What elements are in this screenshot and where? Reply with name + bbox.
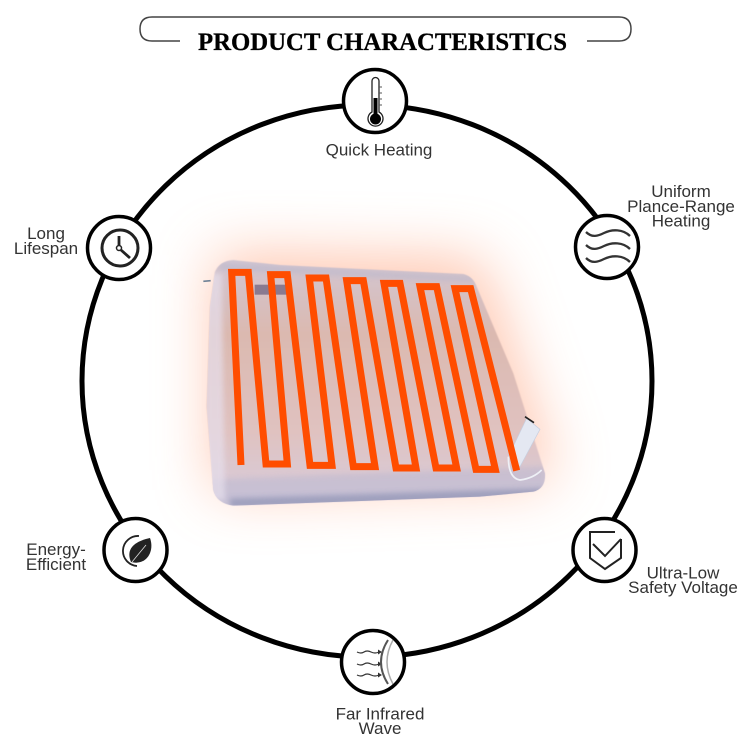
feature: far infrared wave bbox=[336, 630, 424, 738]
feature: long lifespan: Lifespan bbox=[14, 239, 78, 258]
cord end bbox=[203, 278, 211, 284]
feature: uniform heating bbox=[576, 182, 735, 278]
heating element bbox=[232, 272, 517, 471]
main ring bbox=[82, 105, 652, 657]
heated seat pad bbox=[203, 255, 555, 508]
cushion bbox=[203, 260, 547, 508]
icon: thermometer bbox=[344, 70, 406, 132]
label: Far Infrared bbox=[336, 704, 424, 724]
feature: ultra-low safety voltage bbox=[573, 518, 738, 597]
feature: uniform heating: Heating bbox=[652, 212, 710, 230]
icon: shield bbox=[573, 518, 636, 582]
title bracket bbox=[140, 17, 631, 41]
label: Long bbox=[27, 224, 65, 243]
feature: quick heating bbox=[326, 70, 432, 160]
feature: energy efficient bbox=[26, 518, 167, 582]
label: Uniform bbox=[651, 182, 711, 201]
feature: far infrared wave: Wave bbox=[359, 719, 401, 738]
orange glow bbox=[215, 255, 555, 490]
label: Quick Heating bbox=[326, 140, 432, 160]
icon: waves bbox=[576, 216, 638, 278]
feature: uniform heating: Plance-Range bbox=[627, 197, 735, 216]
feature: ultra-low safety voltage: Safety Voltage bbox=[628, 578, 738, 597]
title: PRODUCT CHARACTERISTICS bbox=[198, 29, 567, 56]
controller tab bbox=[508, 418, 540, 467]
label: Ultra-Low bbox=[647, 564, 720, 582]
label tag bbox=[255, 285, 287, 295]
feature: long lifespan bbox=[14, 216, 150, 280]
icon: infrared waves bbox=[342, 630, 404, 694]
icon: clock bbox=[88, 216, 150, 280]
feature: energy efficient: Efficient bbox=[26, 555, 86, 574]
icon: leaf bbox=[104, 518, 167, 582]
label: Energy- bbox=[26, 540, 86, 559]
